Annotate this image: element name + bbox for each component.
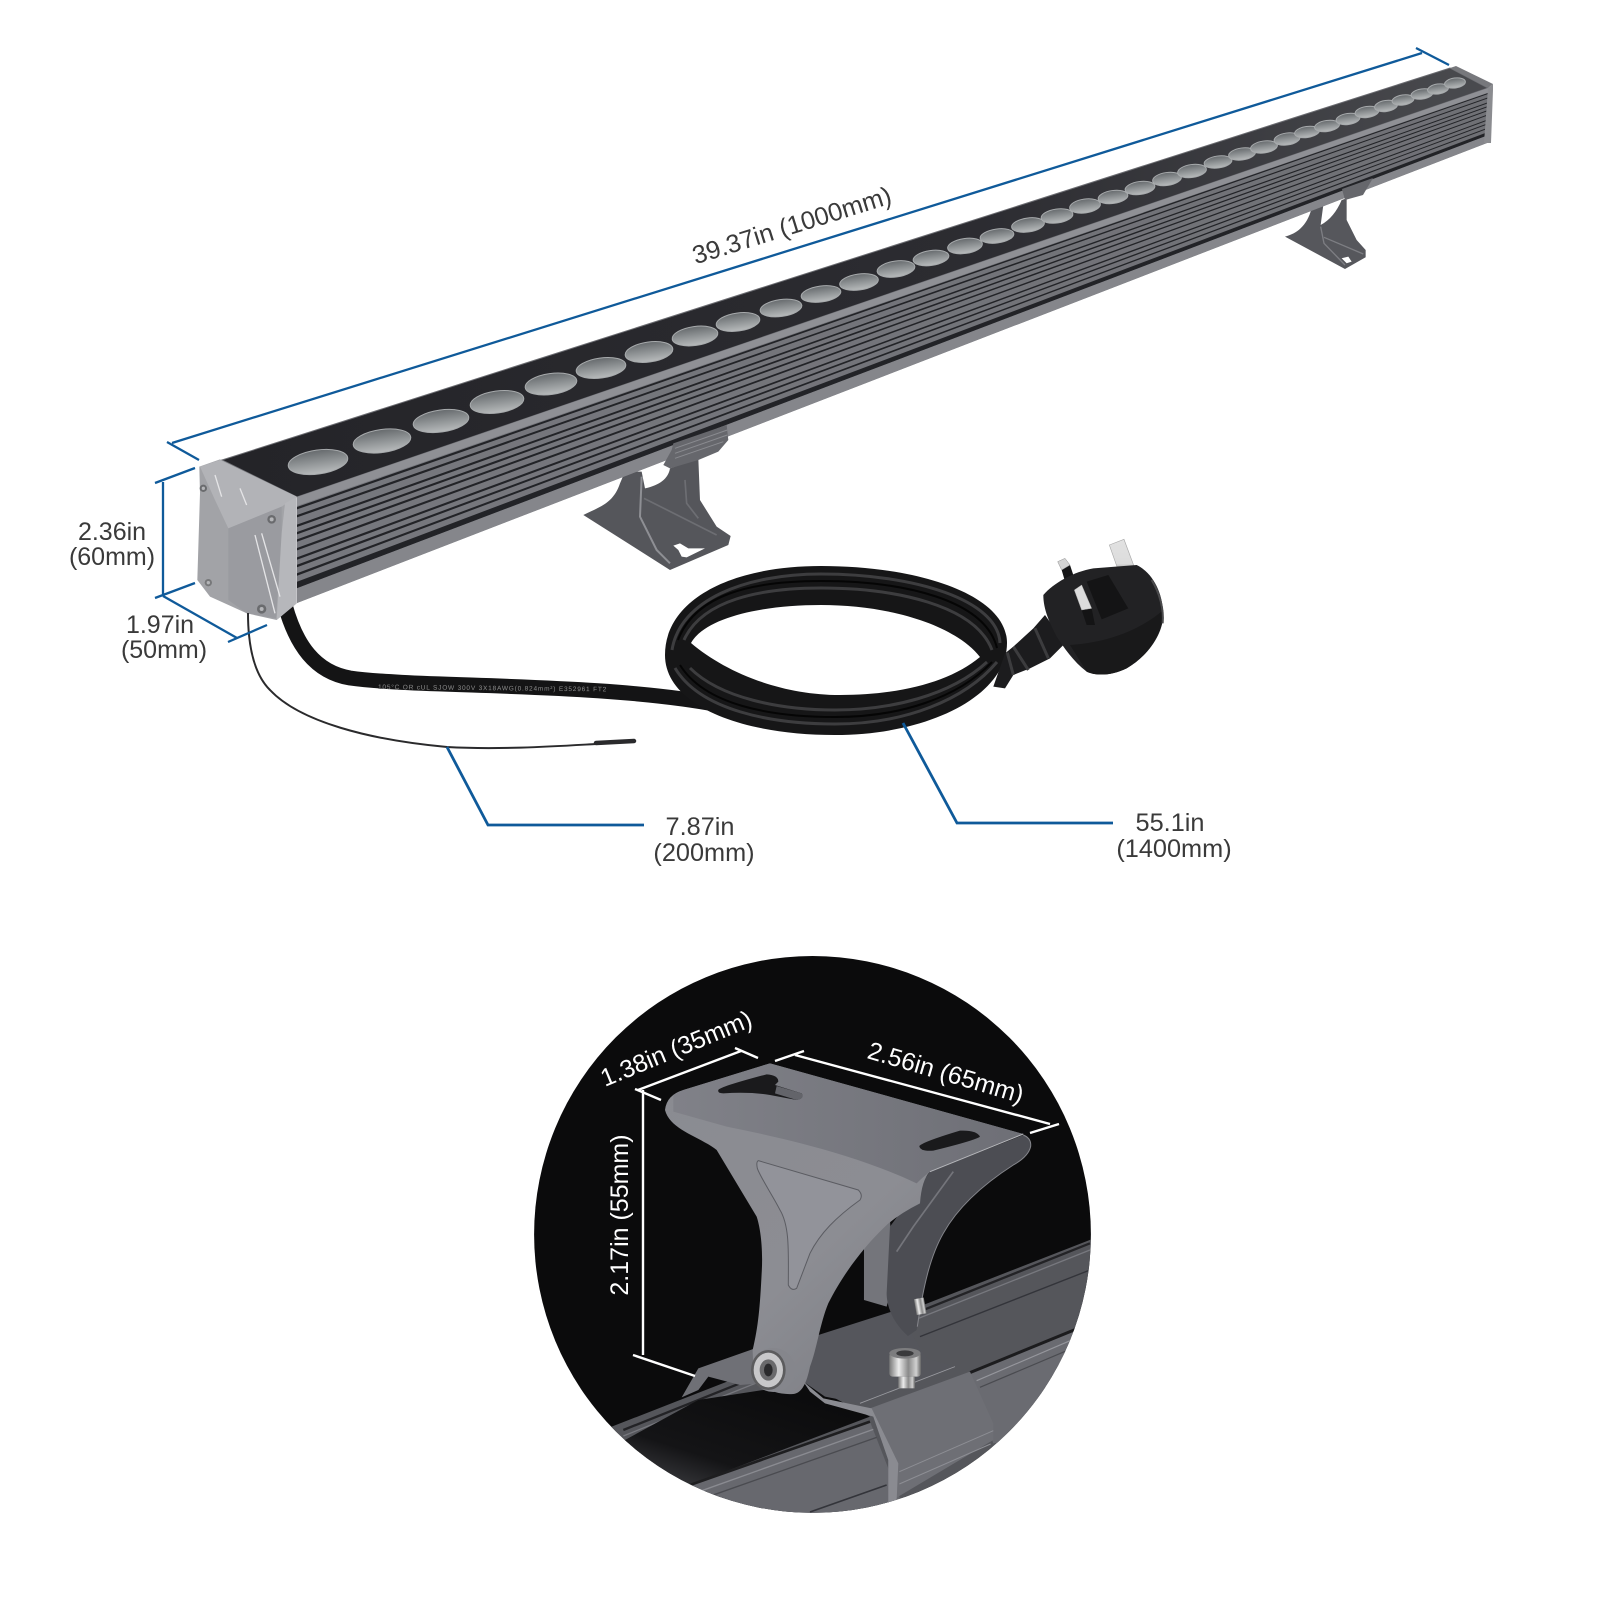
bracket dimension labels bbox=[597, 1005, 1027, 1296]
callout: signal wire length: (200mm) bbox=[653, 839, 755, 867]
rail clamp band bbox=[803, 1372, 993, 1503]
plug body bbox=[1043, 565, 1163, 675]
cord coil bbox=[665, 566, 1007, 735]
clamp plate and flange bbox=[682, 1310, 955, 1403]
main bracket body bbox=[665, 1063, 1023, 1394]
lens row bbox=[287, 77, 1466, 478]
power cord from bar bbox=[285, 605, 720, 705]
end cap bbox=[197, 459, 297, 620]
embossed triangle bbox=[757, 1161, 861, 1289]
rail body bbox=[611, 1240, 1091, 1513]
panel: bracket detail circle bbox=[534, 956, 1107, 1533]
hex nut and cap screw bbox=[751, 1348, 921, 1392]
dimension: overall length: 39.37in (1000mm) bbox=[689, 182, 895, 270]
dimension: overall length bbox=[167, 48, 1449, 460]
mounting bracket: far end bbox=[1285, 198, 1366, 269]
rear post bbox=[864, 1222, 890, 1306]
dimension: height: 2.36in bbox=[78, 518, 146, 546]
printed cord marking: 105°C OR cUL SJOW 300V 3X18AWG(0.824mm²) E352961 FT2 bbox=[378, 683, 607, 693]
dimension: width: (50mm) bbox=[121, 636, 207, 664]
dimension: height: (60mm) bbox=[69, 543, 155, 571]
bar top face with lenses bbox=[222, 68, 1488, 497]
callout: power cord length: (1400mm) bbox=[1116, 835, 1232, 863]
bracket dimension labels: 2.56in (65mm) bbox=[864, 1037, 1027, 1109]
dimension: height bbox=[69, 468, 195, 598]
top plate bbox=[673, 1063, 1023, 1183]
product: LED wall washer light bar bbox=[197, 66, 1493, 748]
dimension: width: 1.97in bbox=[126, 611, 194, 639]
bracket dimension labels: 2.17in (55mm) bbox=[606, 1134, 634, 1296]
thin signal wire bbox=[248, 613, 634, 748]
callout: power cord length: 55.1in bbox=[1136, 809, 1204, 837]
rear bracket leg bbox=[887, 1135, 1031, 1336]
UK plug bbox=[993, 539, 1163, 688]
strain relief bbox=[993, 615, 1065, 688]
callout: signal wire length: 7.87in bbox=[666, 813, 734, 841]
mounting bracket: near end bbox=[583, 458, 731, 570]
bracket dimension lines bbox=[633, 1048, 1059, 1376]
callout: power cord length bbox=[903, 723, 1232, 863]
clipped rail and clamp scene bbox=[611, 1134, 1091, 1513]
dimension: width bbox=[121, 596, 267, 664]
bracket clamps on bar bbox=[663, 178, 1373, 468]
plug pins bbox=[1109, 539, 1137, 580]
rear screw bbox=[914, 1298, 927, 1315]
bar ribbed side face bbox=[297, 66, 1493, 603]
callout: signal wire length bbox=[447, 747, 755, 867]
bracket dimension labels: 1.38in (35mm) bbox=[597, 1005, 756, 1093]
